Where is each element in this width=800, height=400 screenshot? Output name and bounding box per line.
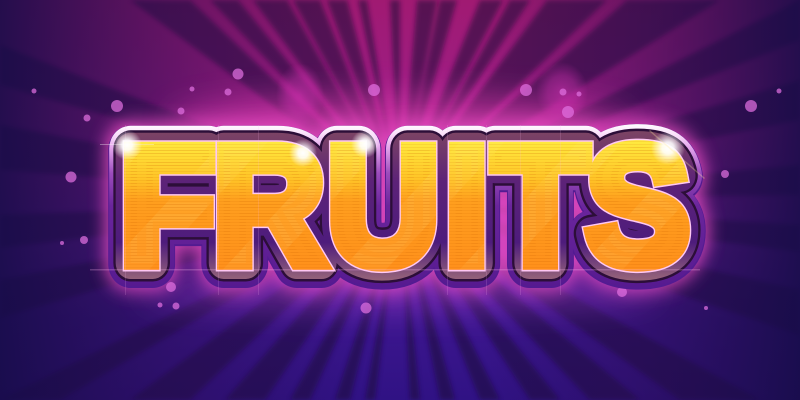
orange face: FRUITS (120, 113, 689, 298)
outer purple shadow: FRUITS (120, 114, 689, 299)
lilac rim: FRUITS (120, 113, 689, 298)
sparkles (100, 130, 705, 179)
scanline texture: FRUITS (120, 113, 689, 298)
diagonal sheen: FRUITS (120, 113, 689, 298)
bokeh particles (32, 68, 782, 314)
purple haze below title (140, 274, 660, 310)
light streaks (90, 125, 700, 295)
dark outline: FRUITS (120, 113, 689, 298)
pink inner edge: FRUITS (120, 113, 689, 298)
magenta haze blobs (276, 62, 588, 127)
glow behind title: FRUITS (120, 113, 689, 298)
title: FRUITS (120, 113, 689, 299)
magenta haze above title (170, 96, 630, 148)
bevel band: FRUITS (120, 113, 689, 298)
